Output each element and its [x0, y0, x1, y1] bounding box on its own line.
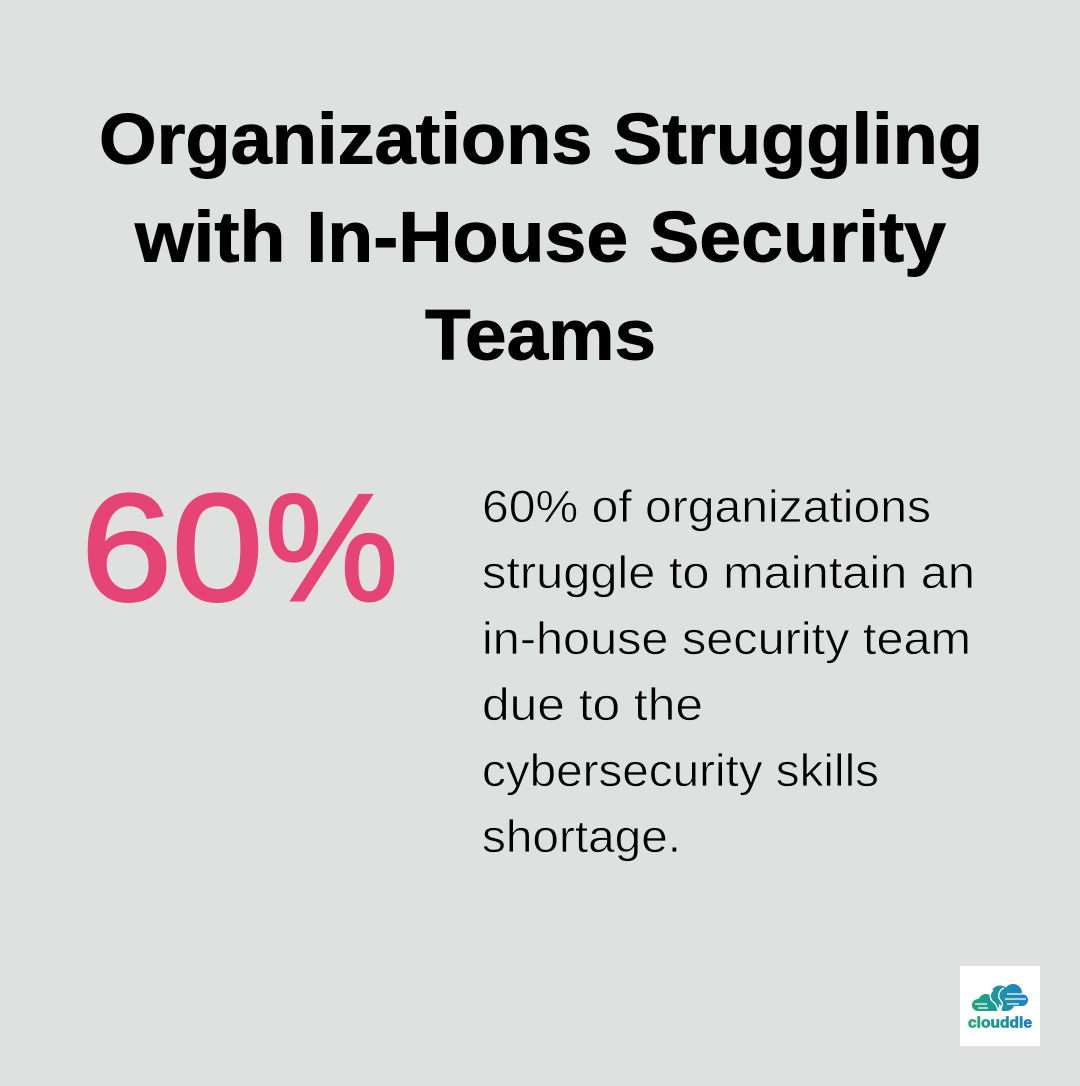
description text [482, 481, 975, 862]
title: Organizations Struggling [99, 100, 983, 180]
description text: struggle to maintain an [482, 547, 975, 598]
big statistic: 60%: % [265, 463, 398, 633]
logo wordmark: clouddle [968, 1014, 1032, 1032]
title: Teams [425, 296, 656, 376]
title: with In-House Security [134, 198, 947, 278]
icon: cloud highlights [975, 988, 1026, 1012]
icon: cloud mark [972, 984, 1028, 1011]
description text: cybersecurity skills [482, 745, 879, 796]
description text: in-house security team [482, 613, 971, 664]
big statistic: 60%: 60 [81, 463, 263, 633]
description text: 60% of organizations [482, 481, 931, 532]
title [99, 100, 983, 376]
big statistic: 60% [81, 463, 398, 633]
description text: shortage. [482, 811, 681, 862]
logo: clouddle [960, 966, 1040, 1046]
description text: due to the [482, 679, 703, 730]
